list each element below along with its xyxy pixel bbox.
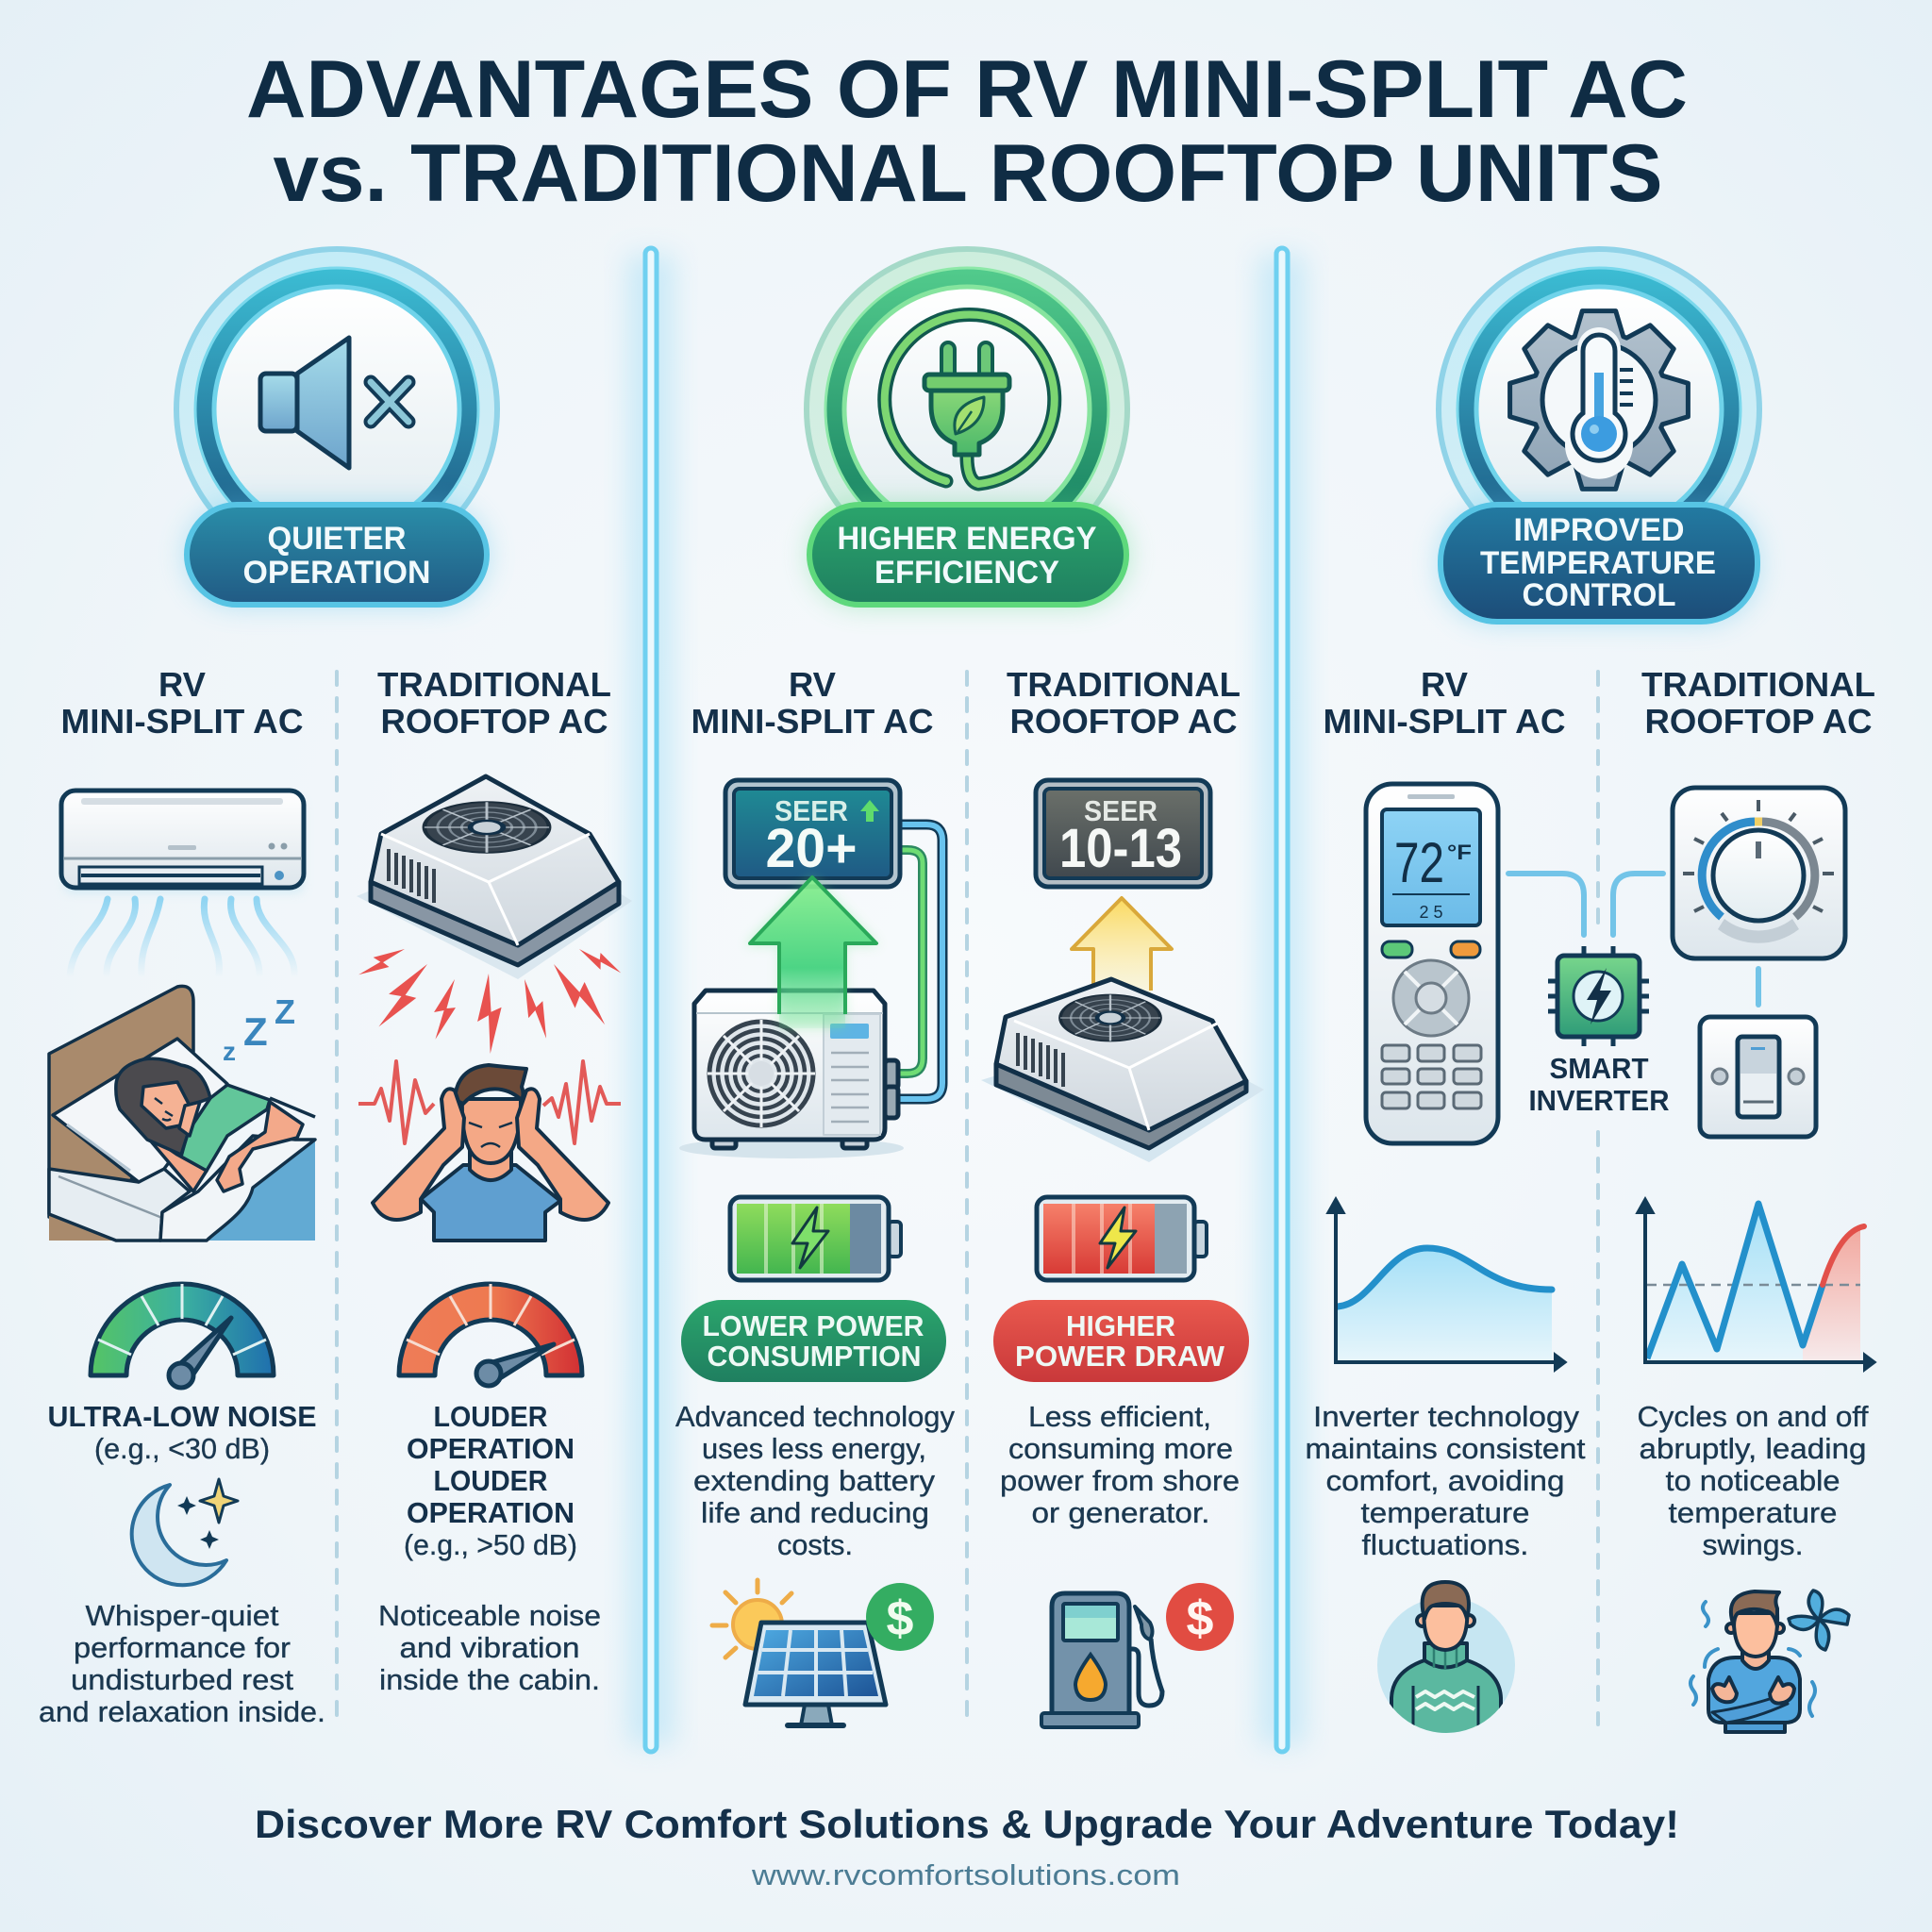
icon: zzz: Z: [275, 992, 295, 1031]
badge: quieter operation: QUIETER: [268, 521, 406, 557]
text: advanced technology: uses less energy,: [702, 1432, 926, 1465]
icon: thermostat dial: [1673, 788, 1845, 958]
column heading: RV mini-split: [60, 665, 304, 741]
text: advanced technology: life and reducing: [701, 1496, 929, 1529]
title: [246, 44, 1688, 219]
badge: improved temperature control: [1439, 249, 1759, 624]
column heading: RV mini-split: [1323, 665, 1566, 741]
text: advanced technology: Advanced technology: [675, 1400, 955, 1433]
text: louder operation: [404, 1400, 577, 1561]
text: advanced technology: [675, 1400, 955, 1561]
column heading: traditional rooftop: TRADITIONAL: [1007, 665, 1241, 704]
display: SEER 10-13: 10-13: [1059, 818, 1182, 879]
text: ultra-low noise: ULTRA-LOW NOISE: [47, 1400, 317, 1433]
text: ultra-low noise: (e.g., <30 dB): [94, 1432, 270, 1465]
text: noticeable noise: Noticeable noise: [378, 1599, 601, 1632]
icon: inverter chip: [1548, 946, 1649, 1046]
pill: lower power consumption: CONSUMPTION: [708, 1340, 921, 1373]
gauge: louder operation: [399, 1284, 582, 1386]
display: SEER 20+: [725, 780, 900, 887]
icon: fuel pump and cost: [1041, 1583, 1234, 1727]
icon: smart remote: 2 5: [1419, 903, 1443, 922]
text: cycles on and off: to noticeable: [1666, 1464, 1840, 1497]
display: SEER 20+: SEER: [774, 794, 848, 827]
column divider right: [1258, 248, 1306, 1752]
column heading: RV mini-split: RV: [789, 665, 836, 704]
icon: cool air waves: [70, 899, 294, 975]
badge: higher energy efficiency: [807, 249, 1129, 607]
column divider left: [627, 248, 675, 1752]
badge: higher energy efficiency: EFFICIENCY: [874, 555, 1059, 591]
column heading: RV mini-split: MINI-SPLIT AC: [1323, 702, 1566, 741]
panel: improved temperature control: [1306, 249, 1875, 1736]
label pill: [187, 505, 487, 605]
icon: noise lightning bolts: [355, 942, 625, 1054]
display: SEER 10-13: SEER: [1084, 794, 1158, 827]
yellow arrow: [1072, 898, 1172, 1000]
pill: lower power consumption: [681, 1300, 946, 1382]
column heading: traditional rooftop: ROOFTOP AC: [1009, 702, 1238, 741]
icon: gear thermometer: [1510, 311, 1688, 489]
icon: green battery: [730, 1197, 901, 1280]
column heading: RV mini-split: [691, 665, 934, 741]
text: whisper-quiet: Whisper-quiet: [85, 1599, 279, 1632]
label: smart inverter: INVERTER: [1528, 1084, 1670, 1117]
text: noticeable noise: [378, 1599, 601, 1696]
icon: muted speaker: [260, 338, 408, 468]
icon: smart remote: [1366, 784, 1498, 1143]
text: louder operation: OPERATION: [407, 1432, 575, 1465]
icon: refrigerant pipes: [889, 824, 942, 1099]
text: advanced technology: costs.: [777, 1528, 853, 1561]
text: louder operation: (e.g., >50 dB): [404, 1528, 577, 1561]
column heading: RV mini-split: RV: [158, 665, 206, 704]
text: less efficient: consuming more: [1008, 1432, 1233, 1465]
column heading: traditional rooftop: [377, 665, 611, 741]
text: louder operation: OPERATION: [407, 1496, 575, 1529]
column heading: traditional rooftop: ROOFTOP AC: [1645, 702, 1872, 741]
icon: comfortable person in sweater: [1377, 1582, 1515, 1736]
title: vs. TRADITIONAL ROOFTOP UNITS: [274, 128, 1662, 219]
label pill: [1441, 505, 1757, 622]
icon: eco plug: [885, 314, 1055, 484]
text: inverter technology: Inverter technology: [1313, 1400, 1580, 1433]
column heading: traditional rooftop: [1641, 665, 1875, 741]
badge: improved temperature control: IMPROVED: [1513, 512, 1685, 548]
pill: higher power draw: [993, 1300, 1249, 1382]
badge: improved temperature control: TEMPERATURE: [1480, 545, 1716, 581]
icon: rooftop AC unit: [981, 898, 1264, 1162]
text: whisper-quiet: [39, 1599, 325, 1728]
text: less efficient: [1000, 1400, 1240, 1529]
column heading: RV mini-split: MINI-SPLIT AC: [60, 702, 304, 741]
column heading: traditional rooftop: TRADITIONAL: [1641, 665, 1875, 704]
chart: stable temperature: [1327, 1198, 1566, 1371]
pill: lower power consumption: LOWER POWER: [702, 1309, 924, 1342]
text: less efficient: or generator.: [1032, 1496, 1209, 1529]
text: ultra-low noise: [47, 1400, 317, 1465]
text: less efficient: power from shore: [1000, 1464, 1240, 1497]
icon: moon and stars: [132, 1479, 238, 1585]
icon: glowing green arrow: [745, 875, 879, 1028]
text: whisper-quiet: and relaxation inside.: [39, 1695, 325, 1728]
text: inverter technology: maintains consistent: [1306, 1432, 1586, 1465]
display: SEER 10-13: [1036, 780, 1210, 887]
icon: wall switch: [1700, 1017, 1816, 1137]
text: less efficient: Less efficient,: [1028, 1400, 1211, 1433]
text: inverter technology: [1306, 1400, 1586, 1561]
column heading: traditional rooftop: ROOFTOP AC: [381, 702, 608, 741]
text: louder operation: LOUDER: [434, 1400, 547, 1433]
panel: quieter operation: [39, 249, 632, 1728]
connector lines: [1508, 874, 1758, 1005]
text: cycles on and off: swings.: [1702, 1528, 1804, 1561]
icon: smart remote: 72: [1394, 831, 1444, 894]
text: advanced technology: extending battery: [693, 1464, 936, 1497]
pill: higher power draw: POWER DRAW: [1015, 1340, 1225, 1373]
title: ADVANTAGES OF RV MINI-SPLIT AC: [246, 44, 1688, 135]
column heading: traditional rooftop: TRADITIONAL: [377, 665, 611, 704]
icon: zzz: Z: [243, 1009, 268, 1054]
text: noticeable noise: inside the cabin.: [379, 1663, 600, 1696]
icon: solar panel and savings: $: [887, 1591, 914, 1646]
text: louder operation: LOUDER: [434, 1464, 547, 1497]
icon: shivering person and fan: [1690, 1591, 1849, 1732]
text: inverter technology: fluctuations.: [1362, 1528, 1528, 1561]
gauge: ultra-low noise: [91, 1284, 274, 1388]
footer url: www.rvcomfortsolutions.com: [751, 1858, 1180, 1891]
badge: improved temperature control: CONTROL: [1523, 577, 1675, 613]
icon: zzz: [223, 992, 295, 1066]
icon: rooftop AC unit: [357, 776, 632, 979]
footer call to action: Discover More RV Comfort Solutions & Upgrade Your Adventure Today!: [255, 1802, 1679, 1846]
text: cycles on and off: temperature: [1668, 1496, 1838, 1529]
icon: solar panel and savings: [712, 1580, 934, 1725]
chart: temperature swings: [1637, 1198, 1875, 1371]
column heading: RV mini-split: RV: [1421, 665, 1468, 704]
panel: higher energy efficiency: [675, 249, 1264, 1727]
illustration: person sleeping: [49, 986, 315, 1241]
label: smart inverter: [1528, 1052, 1670, 1117]
text: whisper-quiet: performance for: [74, 1631, 291, 1664]
text: cycles on and off: [1638, 1400, 1869, 1561]
text: cycles on and off: Cycles on and off: [1638, 1400, 1869, 1433]
illustration: man covering ears: [373, 1065, 608, 1241]
display: SEER 20+: 20+: [766, 818, 857, 879]
text: inverter technology: comfort, avoiding: [1326, 1464, 1564, 1497]
column heading: RV mini-split: MINI-SPLIT AC: [691, 702, 934, 741]
text: cycles on and off: abruptly, leading: [1640, 1432, 1866, 1465]
badge: quieter operation: [176, 249, 497, 607]
badge: higher energy efficiency: HIGHER ENERGY: [838, 521, 1097, 557]
icon: noise waveforms: [358, 1061, 621, 1143]
pill: higher power draw: HIGHER: [1066, 1309, 1175, 1342]
column heading: traditional rooftop: [1007, 665, 1241, 741]
icon: indoor mini-split unit: [61, 791, 304, 891]
label: smart inverter: SMART: [1549, 1052, 1649, 1085]
text: whisper-quiet: undisturbed rest: [71, 1663, 293, 1696]
icon: fuel pump and cost: $: [1187, 1591, 1214, 1646]
label pill: [809, 505, 1126, 605]
text: inverter technology: temperature: [1360, 1496, 1530, 1529]
text: noticeable noise: and vibration: [400, 1631, 579, 1664]
icon: zzz: z: [223, 1037, 236, 1066]
icon: smart remote: °F: [1447, 841, 1472, 864]
badge: quieter operation: OPERATION: [243, 555, 430, 591]
icon: outdoor mini-split unit: [679, 991, 904, 1158]
icon: red battery: [1037, 1197, 1207, 1280]
